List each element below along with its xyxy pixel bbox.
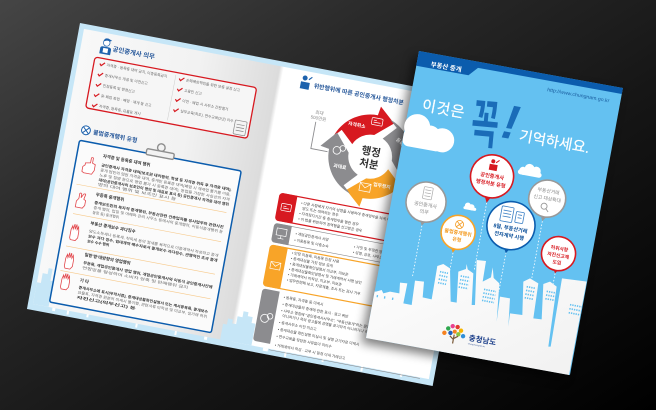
row text: • 사무소 명칭에 "공인중개사사무소", "부동산중개"라는 문자를 xyxy=(281,308,375,330)
logo text: 충청남도 xyxy=(468,332,497,347)
row text: 아니하거나 옥외 광고물에 성명을 표기하지 아니하거나 허위로 xyxy=(282,313,376,336)
header band xyxy=(416,51,623,103)
duties list: 휴·폐업 휴업 · 폐업 · 재개 등 신고 xyxy=(101,93,153,108)
duties list: 중개사무소 개설 및 이전신고 xyxy=(104,73,149,86)
label: fine: 과태료 xyxy=(333,162,348,172)
bubble: reporting scope: 신고 대상확대 xyxy=(533,193,562,205)
skyline: lower left xyxy=(33,266,258,345)
panel: revocation row xyxy=(275,193,447,252)
bubble: administrative sanctions xyxy=(466,151,517,207)
panel: cancellation row xyxy=(271,223,441,274)
header label: 부동산 중개 xyxy=(430,59,463,74)
row text: • 중개대상물의 중개에 관한 표시 · 광고 위반 xyxy=(282,301,350,319)
label: registration cancel: 등록취소 xyxy=(394,136,412,154)
label: max fine: 500만원 xyxy=(310,113,327,122)
row text: • 이중등록 및 이중소속 xyxy=(294,237,330,249)
heading: sanctions: 위반행위에 따른 공인중개사 행정처분 xyxy=(313,82,405,107)
item 2: unregistered brokerage: 등장 등) 중개행위 xyxy=(92,210,120,220)
item 4: one-sided sales: 일방'방'대방향의 영업행위 xyxy=(84,251,131,267)
bubble: electronic contract: 8월, 부동산거래 xyxy=(493,221,528,235)
center label xyxy=(358,144,382,172)
duties list: 이전 · 폐업 시 사무소 간판철거 xyxy=(182,98,229,112)
row text: • 이 법을 위반하여 징역형을 선고받은 경우 xyxy=(298,216,363,233)
item 3: excess fees: 보수 과다 징수, 임대계약 매수자로서 중개보수 과다징수, 관행적인 초과 중개 xyxy=(88,233,219,263)
bubble: agent duties: 공인중개사 xyxy=(414,200,438,211)
icon: sanction person xyxy=(300,75,312,90)
page base xyxy=(27,23,486,386)
row text: • 중개사무소 이전 미신고 xyxy=(279,320,318,332)
icon: prohibited X xyxy=(81,125,91,135)
row text xyxy=(274,294,379,365)
page inner area xyxy=(33,29,480,379)
duties list: 고용인 신고 xyxy=(184,88,203,96)
row text: • 자격정지기간 중 중개업무를 행한 경우 xyxy=(299,211,360,227)
check marks xyxy=(92,62,184,122)
logo: Chungnam xyxy=(441,322,498,351)
bubble: self report xyxy=(538,234,578,276)
skyline ticks in bottom band xyxy=(52,308,402,379)
bubble: electronic contract: 전자계약 시행 xyxy=(494,229,525,242)
row text xyxy=(298,200,398,239)
bubble: administrative sanctions: 행정처분 유형 xyxy=(475,177,507,190)
panel: front cover xyxy=(366,51,623,375)
title: must: 꼭 xyxy=(468,95,501,156)
row text xyxy=(287,250,367,296)
row text: • 거래계약서 미작성, 미교부, 미보존 xyxy=(288,272,343,287)
cover shadow xyxy=(361,56,618,380)
panel: open brochure spread xyxy=(27,23,486,386)
label: max fine: 최대 xyxy=(315,109,324,117)
item 1: license lending: 대여(공인중개사의 보조인이 명의 및 대표로 표시 등) 공인중개사 자격증 대여 행위 xyxy=(98,177,229,207)
bubble: illegal brokerage: 유형 xyxy=(452,235,462,244)
item 2: unregistered brokerage: 무등록 중개행위 xyxy=(95,191,125,203)
bubble: self report: 허위사항 xyxy=(550,244,569,254)
label: license revocation: 자격취소 xyxy=(348,120,367,130)
row text: • 중개대상물확인설명서 미교부, 미보존 xyxy=(290,261,350,277)
row text: • 다른 사람에게 자기의 성명을 사용하여 중개업무를 하게 하거나 xyxy=(301,200,398,224)
url: http://www.chungnam.go.kr xyxy=(547,87,610,104)
segment: registration cancel xyxy=(376,119,427,183)
bubble: agent duties xyxy=(402,179,449,229)
icon: clip xyxy=(146,141,176,160)
duties list: 손해배상책임을 위한 보증 설정 신고 xyxy=(186,77,241,93)
item 1: license lending xyxy=(80,149,234,211)
center label: 처분 xyxy=(358,157,380,172)
item 5: others: 중개사무소에 표시(부착서류), 중개대상물확인설명서 또는 계서류목록, 중개보수 xyxy=(78,285,209,314)
item 1: license lending: 명의 대여 행위 및 보조인 표시 등 xyxy=(97,182,178,202)
row text: • 성명, 상호, 사무소 대여 xyxy=(353,249,391,261)
item 5: others: 자진신고(의무신고) 등 xyxy=(76,295,137,311)
icon: envelope xyxy=(359,182,371,192)
cloud: small top xyxy=(517,162,543,178)
panel: fine row xyxy=(252,288,431,378)
icon: hand xyxy=(64,252,75,269)
item 1: license lending: 공인중개사 자격증 대여(보조원 대리행위, 학생 등 자격증 취득 후 자격증 대여), xyxy=(101,162,232,192)
bubble: illegal brokerage xyxy=(438,213,478,256)
item 4: one-sided sales: 무등록, 개업공인중개사 영업 행위, 개업공인중개사와 이동식 공인중개사간에 xyxy=(83,260,214,290)
segment: fine xyxy=(313,130,365,194)
item 2: unregistered brokerage: 중개보조원의 독자적 중개행위, 부동산관련 건축업자들 유사업무와 관련사진 xyxy=(94,200,225,229)
bubble: illegal brokerage: 불법중개행위 xyxy=(444,227,473,239)
item 1: license lending: 중개 법인의 임원 자격증 대여, 중개인 등록증 대여(폐업 시 재개업 불가를 이용, xyxy=(100,167,231,197)
cover content xyxy=(365,51,623,375)
icon: id card xyxy=(371,117,383,126)
row text: • 업무관련해 보고, 자료제출, 조사 또는 검사 거부 xyxy=(287,277,362,296)
icon: hand xyxy=(75,193,87,209)
item 4: one-sided sales: 연합망을 형성하여 소비자 현혹 및 판매행위 금지 xyxy=(82,265,189,290)
row text: • 거래계약서 작성 · 교부 시 일정 이내 거래신고 xyxy=(274,342,346,361)
bubble: self report: 도입 xyxy=(552,258,562,267)
bubble: agent duties: 의무 xyxy=(419,208,430,216)
duties list: 실무교육(최초), 연수교육(2년) 이수 xyxy=(180,108,234,123)
panel: suspension row xyxy=(263,244,437,317)
item 3: excess fees: 부동산 중개보수 과다징수 xyxy=(90,220,136,235)
cloud: large xyxy=(401,112,458,154)
label: max fine xyxy=(310,108,328,122)
duties list: 인장등록 및 변경신고 xyxy=(102,83,136,94)
center label: 행정 xyxy=(360,144,382,160)
panel: duties red box xyxy=(86,57,257,138)
cover background xyxy=(366,51,623,375)
dotted guide lines xyxy=(413,192,565,301)
icon: coins xyxy=(332,144,346,156)
chart: sanctions cycle xyxy=(296,94,430,216)
panel: illegal types blue box xyxy=(50,129,243,333)
item 1: license lending: 자격증 및 등록증 대여 행위 xyxy=(102,153,151,168)
cloud: tiny xyxy=(463,202,477,211)
icon: hand xyxy=(69,224,80,241)
windows xyxy=(377,272,584,315)
item 1: license lending: 노후 및 질병 등으로 영업 불가 시 등록증 대여), 동업을 가장한 사실상의 자격 xyxy=(99,172,230,202)
item 4: one-sided sales xyxy=(64,248,215,296)
item 3: excess fees: 양도소득세나 등록세, 취득세 등의 절세를 목적으로 이중계약서 작성하고 중개 xyxy=(89,228,219,258)
row text xyxy=(294,231,402,263)
label: suspension: 업무정지 xyxy=(373,181,391,191)
item 5: others: 기 타 xyxy=(79,277,90,285)
bubble: electronic contract xyxy=(482,198,539,258)
row text: • 중개대상물 확인설명 미실시 및 설명 근거자료 미제시 xyxy=(277,327,360,347)
item 3: excess fees xyxy=(69,216,221,268)
title: remember: 기억하세요. xyxy=(518,128,591,157)
row text: • 등록증, 자격증 등 미게시 xyxy=(283,294,324,307)
logo tree xyxy=(441,322,467,345)
item 2: unregistered brokerage xyxy=(74,188,227,239)
icon: hand xyxy=(82,156,96,175)
heading: agent duties: 공인중개사 의무 xyxy=(112,44,156,61)
item 3: excess fees: 보수 수수 행위 xyxy=(87,238,110,247)
duties list xyxy=(99,62,241,134)
bubble: administrative sanctions: 공인중개사 xyxy=(480,170,505,182)
title: this: 이것은 xyxy=(421,97,467,122)
row text: • 거짓 및 부정한 방법으로 등록 xyxy=(354,244,401,258)
segment: suspension xyxy=(344,162,408,214)
skyline on cover xyxy=(366,260,587,375)
bubble: reporting scope: 부동산거래 xyxy=(537,186,560,197)
item 5: others xyxy=(59,273,211,324)
row text: • 중개대상물 거짓 정보 공개 xyxy=(291,256,333,268)
logo: Chungnam: Chungcheongnam-do xyxy=(468,343,485,348)
heading: illegal brokerage types: 불법중개행위 유형 xyxy=(92,128,138,144)
duties list: 자격증, 등록증, 요율표 게시 xyxy=(99,103,141,116)
bubble: self report: 자진신고제 xyxy=(547,250,570,261)
item 5: others: 요율표, 자격증 원본의 미게시 불이행, 관련서류 미작성 및 미교부, 실거래 허위 xyxy=(77,290,208,319)
row text: • 연수교육을 정당한 사유없이 미이수 xyxy=(276,333,333,349)
row text: • 개업공인중개사 사망 xyxy=(295,231,330,242)
icon: checklist xyxy=(233,120,247,136)
row text: 양도 또는 대여하는 경우 xyxy=(302,206,340,218)
row text: • 인장 미등록, 미등록 인장 사용 xyxy=(292,250,340,264)
title: exclamation: ! xyxy=(498,95,523,151)
duties list: 자격증 · 등록증 대여 금지, 이중등록금지 xyxy=(106,62,168,79)
item 2: unregistered brokerage: 중개 행위, 업일 및 여해와 관리 사무소 등에서의 중개행위, 이동식중개행위 등 xyxy=(93,205,224,234)
icon: agent with tablet xyxy=(99,37,113,55)
segment: license revocation xyxy=(333,99,397,151)
icon: hand xyxy=(60,273,71,290)
bubble: reporting scope xyxy=(525,177,569,225)
row text: • 중개대상물확인설명서 및 거래계약서 서명 날인 xyxy=(289,266,363,285)
